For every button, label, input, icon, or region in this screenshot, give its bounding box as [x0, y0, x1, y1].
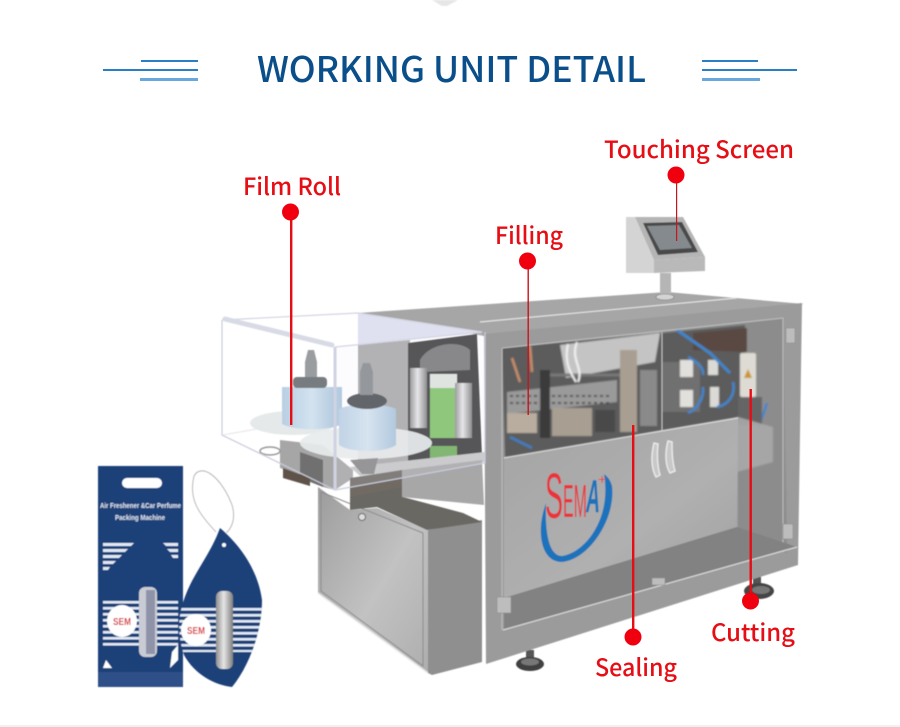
- callout: touching screen: Touching Screen: [604, 130, 794, 165]
- back film roll: [250, 350, 342, 435]
- blister vial: [139, 587, 157, 657]
- SEMA logo: EM: [563, 475, 587, 527]
- door panel: [504, 418, 738, 598]
- callout: film roll: Film Roll: [243, 167, 341, 202]
- leaf shaped air freshener: [178, 528, 268, 687]
- leaf vial: [216, 591, 233, 669]
- machine: [222, 217, 804, 675]
- card logo badge: [107, 605, 137, 637]
- card caption: Air Freshener &Car Perfume: [100, 503, 181, 510]
- top surface: [358, 292, 804, 336]
- SEMA logo: [541, 460, 612, 562]
- bottom edge strip: [0, 725, 900, 727]
- hanging string: [192, 471, 234, 533]
- leaf logo badge: [181, 614, 211, 646]
- window frame lines and door divider: [502, 318, 783, 630]
- callout: cutting: Cutting: [711, 613, 795, 648]
- film base bracket: [260, 440, 484, 505]
- lower left cabinet: [318, 484, 482, 675]
- product: air freshener packaging: [98, 466, 268, 687]
- front film roll: [300, 363, 432, 474]
- callout: sealing: [595, 425, 677, 683]
- door handles: [652, 441, 675, 477]
- blister card: [98, 466, 183, 687]
- top shadow smudge: [432, 0, 458, 6]
- acrylic cover: [222, 313, 485, 490]
- title: WORKING UNIT DETAIL: [257, 42, 646, 93]
- front body frame: [484, 303, 802, 664]
- SEMA logo: A: [586, 470, 600, 522]
- leaf shaped air freshener: SEM: [187, 626, 205, 637]
- machine window interior: [502, 318, 787, 553]
- SEMA logo: S: [545, 460, 563, 532]
- kick area: [504, 527, 797, 630]
- callout: filling: Filling: [495, 216, 563, 251]
- rear left wall: [358, 340, 410, 470]
- callout: sealing: Sealing: [595, 648, 677, 683]
- blister card: Packing Machine: [115, 515, 165, 522]
- callout: cutting: [711, 389, 795, 648]
- touch screen control box: [626, 217, 705, 300]
- callout: touching screen: [604, 130, 794, 241]
- right heading lines: [702, 60, 797, 81]
- card stripes: [103, 543, 178, 646]
- lavender reflection on acrylic: [358, 313, 482, 345]
- blister card: SEM: [113, 617, 131, 628]
- heading with decorative lines: [103, 42, 797, 93]
- callout: film roll: [243, 167, 341, 425]
- machine feet: [516, 577, 774, 671]
- door hinges: [497, 328, 795, 613]
- film compartment: [350, 334, 485, 476]
- SEMA logo: +: [598, 471, 606, 487]
- left heading lines: [103, 60, 198, 81]
- callout: filling: [495, 216, 563, 415]
